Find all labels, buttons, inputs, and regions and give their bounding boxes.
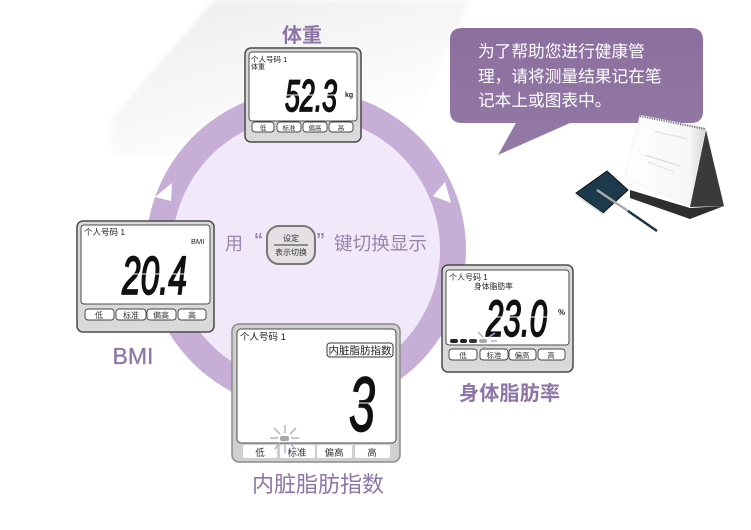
icon: desk calendar	[625, 115, 724, 219]
panel: weight display: 标准	[282, 123, 296, 132]
panel: visceral fat display: 标准	[287, 447, 307, 459]
panel: visceral fat display	[232, 324, 400, 462]
panel: body fat display: 偏高	[514, 350, 530, 360]
panel: weight display: 个人号码 1	[251, 55, 287, 64]
panel: weight display: 高	[338, 123, 345, 132]
callout: speech bubble: 为了帮助您进行健康管	[478, 42, 645, 61]
heading: weight: 体重	[282, 24, 322, 47]
background diagonal shade	[112, 0, 470, 155]
arrow: right triangle	[433, 182, 451, 203]
panel: visceral fat display: 内脏脂肪指数	[328, 344, 392, 357]
panel: body fat display: 低	[459, 350, 467, 360]
panel: BMI display: 高	[188, 310, 196, 320]
panel: BMI display: 标准	[123, 310, 139, 320]
panel: weight display: 52.3	[285, 72, 337, 121]
icon: flashing indicator	[270, 425, 299, 453]
center text with key: 用	[225, 234, 243, 254]
heading: visceral fat: 内脏脂肪指数	[252, 472, 384, 497]
panel: visceral fat display: 3	[349, 362, 375, 448]
center text with key: 设定	[283, 233, 299, 243]
panel: weight display: kg	[345, 92, 353, 99]
panel: BMI display: 低	[95, 310, 103, 320]
panel: body fat display: 个人号码 1	[449, 273, 488, 282]
heading: BMI: BMI	[113, 343, 153, 369]
ring with inner disc	[146, 90, 466, 410]
panel: visceral fat display: 高	[367, 447, 377, 459]
panel: weight display: 偏高	[308, 123, 322, 132]
callout: speech bubble	[450, 28, 703, 155]
callout: speech bubble: 记本上或图表中。	[478, 91, 612, 110]
panel: body fat display: 23.0	[485, 290, 547, 347]
panel: body fat display: 标准	[486, 350, 502, 360]
icon: notebook and pen	[576, 171, 657, 231]
center text with key: 键切换显示	[334, 233, 427, 254]
center text with key	[225, 226, 427, 264]
panel: BMI display: 个人号码 1	[84, 227, 125, 237]
panel: BMI display: 20.4	[121, 246, 187, 306]
center text with key: “	[254, 230, 263, 250]
panel: visceral fat display: 偏高	[324, 447, 344, 459]
center text with key: 表示切换	[275, 247, 307, 257]
panel: visceral fat display: 低	[255, 447, 265, 459]
panel: body fat display: 高	[547, 350, 555, 360]
panel: BMI display	[77, 221, 214, 332]
arrow: left triangle	[155, 183, 172, 201]
callout: speech bubble: 理，请将测量结果记在笔	[478, 67, 662, 86]
panel: body fat display	[442, 265, 573, 372]
panel: visceral fat display: 个人号码 1	[240, 332, 286, 343]
heading: body fat: 身体脂肪率	[459, 381, 560, 405]
panel: weight display	[245, 48, 361, 142]
panel: BMI display: BMI	[191, 237, 204, 246]
panel: body fat display: 身体脂肪率	[474, 281, 513, 291]
panel: weight display: 低	[260, 123, 267, 132]
panel: weight display: 体重	[251, 62, 265, 71]
panel: body fat display: %	[558, 308, 565, 317]
center text with key: ”	[316, 230, 325, 250]
panel: BMI display: 偏高	[153, 310, 169, 320]
